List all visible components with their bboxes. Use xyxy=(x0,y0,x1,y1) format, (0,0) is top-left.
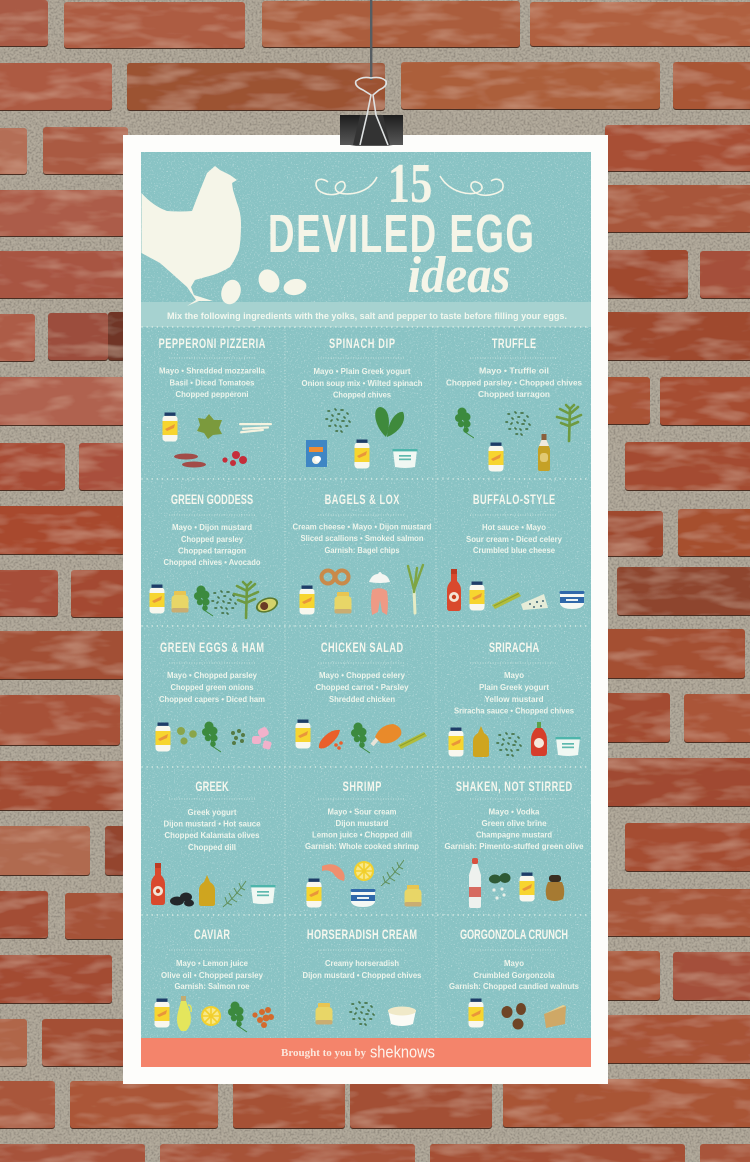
icon: celery xyxy=(398,732,427,749)
card: green goddess xyxy=(150,493,280,618)
card: greek: GREEK xyxy=(195,780,229,795)
title: deviled egg: DEVILED EGG xyxy=(268,203,534,264)
card: caviar: Mayo • Lemon juice xyxy=(176,958,248,968)
icon: scallion xyxy=(408,565,423,613)
icon: blue cheese xyxy=(521,594,548,610)
icon: mayo xyxy=(150,584,164,614)
icon: dijon jar xyxy=(172,591,188,612)
icon: vodka xyxy=(469,858,481,908)
icon: cream cheese xyxy=(369,572,390,583)
card: gorgonzola crunch: GORGONZOLA CRUNCH xyxy=(460,928,568,943)
card: shrimp: Garnish: Whole cooked shrimp xyxy=(305,841,419,851)
icon: mayo xyxy=(470,582,484,610)
footer band: sheknows xyxy=(370,1042,435,1062)
teal poster panel xyxy=(141,152,591,1038)
card: spinach dip: Onion soup mix • Wilted spinach xyxy=(302,378,422,388)
icon: chives xyxy=(506,412,530,435)
icon: greek yogurt xyxy=(556,737,580,756)
icon: tomatoes xyxy=(222,451,247,466)
icon: parsley xyxy=(351,722,370,753)
card: shrimp: Lemon juice • Chopped dill xyxy=(312,830,412,840)
icon: mayo xyxy=(468,998,484,1028)
card: shaken, not stirred: Champagne mustard xyxy=(476,830,552,840)
icon: mayo xyxy=(156,722,170,752)
icon: greek yogurt xyxy=(392,449,418,468)
icon: olive oil xyxy=(177,996,191,1031)
card: sriracha: Yellow mustard xyxy=(484,694,544,704)
icon: gorgonzola wedge xyxy=(544,1005,566,1028)
card: pepperoni pizzeria: Mayo • Shredded mozzarella xyxy=(159,366,265,376)
icon: parsley xyxy=(194,586,213,616)
card: green goddess: Chopped tarragon xyxy=(178,546,246,556)
card: buffalo-style xyxy=(447,493,584,611)
icon: dijon jar xyxy=(404,885,422,906)
icon: mayo xyxy=(488,442,504,472)
card: shrimp xyxy=(305,780,422,908)
icon: spinach xyxy=(375,407,404,437)
icon: parsley xyxy=(455,408,474,438)
card: spinach dip: Chopped chives xyxy=(333,390,391,400)
icon: salmon roe xyxy=(252,1007,274,1028)
card: bagels and lox: Cream cheese • Mayo • Dijon mustard xyxy=(292,522,432,532)
icon: greek yogurt xyxy=(250,885,276,904)
icon: horseradish bowl xyxy=(388,1006,416,1026)
icon: mayo xyxy=(448,728,464,756)
card: shrimp: Dijon mustard xyxy=(336,818,388,828)
card: spinach dip xyxy=(302,337,422,468)
card: sriracha: Plain Greek yogurt xyxy=(479,682,549,692)
icon: chives xyxy=(326,409,350,432)
card: chicken salad: Chopped carrot • Parsley xyxy=(316,682,409,692)
icon: capers xyxy=(231,729,245,745)
card: green eggs and ham: Chopped green onions xyxy=(170,682,254,692)
title: 15: 15 xyxy=(388,152,432,214)
card: truffle: TRUFFLE xyxy=(492,337,536,352)
title flourish right xyxy=(440,176,503,195)
card: shaken, not stirred xyxy=(444,780,584,908)
icon: champagne mustard xyxy=(546,875,564,901)
card: sriracha: SRIRACHA xyxy=(489,641,540,656)
card: sriracha: Mayo xyxy=(504,670,524,680)
icon: avocado xyxy=(254,594,280,616)
card: horseradish cream: Dijon mustard • Chopped chives xyxy=(302,970,422,980)
icon: chicken drumstick xyxy=(372,724,401,745)
card: bagels and lox: Sliced scallions • Smoked salmon xyxy=(300,533,424,543)
card: spinach dip: Mayo • Plain Greek yogurt xyxy=(314,366,411,376)
card: shrimp: SHRIMP xyxy=(343,780,382,795)
icon: chives xyxy=(497,733,521,756)
card: sriracha: Sriracha sauce • Chopped chives xyxy=(454,706,574,716)
card: gorgonzola crunch xyxy=(449,928,579,1030)
card: chicken salad: CHICKEN SALAD xyxy=(321,641,403,656)
card: horseradish cream: Creamy horseradish xyxy=(325,958,399,968)
icon: dijon jar xyxy=(334,592,352,614)
icon: mayo xyxy=(162,412,178,442)
icon: soup mix box xyxy=(306,440,327,467)
card: caviar: CAVIAR xyxy=(194,928,231,943)
icon: dijon mustard xyxy=(199,875,215,906)
icon: salmon xyxy=(371,588,388,615)
icon: yellow mustard xyxy=(473,726,489,757)
card: green goddess: Mayo • Dijon mustard xyxy=(172,522,252,532)
card: gorgonzola crunch: Mayo xyxy=(504,958,524,968)
icon: bagel chips xyxy=(322,570,348,584)
card: green eggs and ham: Chopped capers • Diced ham xyxy=(159,694,265,704)
icon: dill xyxy=(381,860,404,886)
icon: green onions xyxy=(177,727,197,745)
icon: sriracha xyxy=(531,722,547,756)
card: shrimp: Mayo • Sour cream xyxy=(328,806,397,816)
card: green eggs and ham xyxy=(156,641,272,752)
card: shaken, not stirred: Garnish: Pimento-stuffed green olive xyxy=(444,841,584,851)
card: bagels and lox: Garnish: Bagel chips xyxy=(324,545,400,555)
icon: dijon jar xyxy=(316,1003,332,1024)
card: buffalo-style: Hot sauce • Mayo xyxy=(482,522,546,532)
card: truffle: Chopped parsley • Chopped chives xyxy=(446,378,582,388)
icon: olives xyxy=(170,892,194,906)
icon: basil xyxy=(197,414,222,439)
card: chicken salad: Shredded chicken xyxy=(329,694,395,704)
binder clip xyxy=(340,77,403,146)
icon: shrimp xyxy=(322,864,345,881)
card: greek: Chopped dill xyxy=(188,842,236,852)
card: chicken salad xyxy=(296,641,427,753)
card: pepperoni pizzeria: Basil • Diced Tomatoes xyxy=(170,378,255,388)
card: green goddess: Chopped chives • Avocado xyxy=(164,557,260,567)
card: caviar: Olive oil • Chopped parsley xyxy=(161,970,263,980)
card: horseradish cream: HORSERADISH CREAM xyxy=(307,928,417,943)
icon: mayo xyxy=(300,586,314,614)
hen silhouette xyxy=(142,166,241,306)
icon: pepperoni xyxy=(174,454,206,468)
card: truffle: Chopped tarragon xyxy=(478,389,550,399)
card: green goddess: Chopped parsley xyxy=(181,534,243,544)
icon: green olives and brine xyxy=(489,873,510,900)
card: shaken, not stirred: Green olive brine xyxy=(482,818,547,828)
icon: hot sauce xyxy=(151,863,165,905)
card: greek: Dijon mustard • Hot sauce xyxy=(164,818,261,828)
icon: parsley xyxy=(202,722,221,752)
icon: carrot xyxy=(319,730,343,750)
footer band: Brought to you by xyxy=(281,1048,366,1059)
card: caviar: Garnish: Salmon roe xyxy=(174,981,250,991)
card: buffalo-style: Sour cream • Diced celery xyxy=(466,534,562,544)
card: truffle: Mayo • Truffle oil xyxy=(479,366,549,376)
icon: mayo xyxy=(354,440,370,468)
icon: mayo xyxy=(520,872,534,902)
card: shaken, not stirred: SHAKEN, NOT STIRRED xyxy=(456,780,572,795)
icon: tarragon xyxy=(557,405,581,441)
card: gorgonzola crunch: Garnish: Chopped candied walnuts xyxy=(449,981,579,991)
icon: mozzarella xyxy=(239,423,272,433)
icon: lemon xyxy=(354,861,374,881)
white poster sheet xyxy=(123,135,608,1084)
icon: sour cream xyxy=(350,889,376,907)
card: greek xyxy=(151,780,276,907)
card: bagels and lox: BAGELS & LOX xyxy=(325,493,400,508)
icon: chives xyxy=(350,1002,374,1025)
card: sriracha xyxy=(448,641,580,757)
footer band xyxy=(141,1038,591,1067)
icon: mayo xyxy=(296,720,310,748)
icon: diced ham xyxy=(252,726,272,750)
card: pepperoni pizzeria: Chopped pepperoni xyxy=(176,389,248,399)
title: ideas: ideas xyxy=(408,247,510,304)
card: bagels and lox xyxy=(292,493,432,615)
card: shaken, not stirred: Mayo • Vodka xyxy=(488,806,540,816)
icon: chives xyxy=(212,591,236,614)
intro band: Mix the following ingredients with the yolks, salt and pepper to taste before filling your eggs. xyxy=(167,311,567,321)
title flourish left xyxy=(316,177,377,195)
card: truffle xyxy=(446,337,582,472)
icon: truffle oil xyxy=(538,434,550,471)
card: spinach dip: SPINACH DIP xyxy=(329,337,395,352)
card: buffalo-style: Crumbled blue cheese xyxy=(473,545,555,555)
icon: dill xyxy=(223,881,246,907)
icon: hot sauce xyxy=(447,569,461,611)
icon: mayo xyxy=(306,878,322,908)
card: chicken salad: Mayo • Chopped celery xyxy=(319,670,405,680)
card: greek: Greek yogurt xyxy=(188,807,237,817)
card: buffalo-style: BUFFALO-STYLE xyxy=(473,493,555,508)
card: green eggs and ham: GREEN EGGS & HAM xyxy=(160,641,264,656)
icon: celery xyxy=(492,592,521,609)
eggs xyxy=(218,266,308,307)
icon: mayo xyxy=(154,998,170,1028)
card: horseradish cream xyxy=(302,928,422,1026)
card: pepperoni pizzeria: PEPPERONI PIZZERIA xyxy=(159,337,266,352)
card: green eggs and ham: Mayo • Chopped parsley xyxy=(167,670,257,680)
icon: sour cream xyxy=(560,591,584,609)
card: gorgonzola crunch: Crumbled Gorgonzola xyxy=(474,970,555,980)
icon: walnuts xyxy=(502,1003,526,1030)
card: green goddess: GREEN GODDESS xyxy=(171,493,253,508)
card: pepperoni pizzeria xyxy=(159,337,272,468)
hanging string xyxy=(370,0,372,80)
icon: parsley xyxy=(228,1002,247,1032)
card: caviar xyxy=(154,928,274,1032)
card: greek: Chopped Kalamata olives xyxy=(164,830,260,840)
icon: lemon xyxy=(201,1006,221,1026)
icon: tarragon xyxy=(234,582,258,618)
intro band xyxy=(141,302,591,327)
